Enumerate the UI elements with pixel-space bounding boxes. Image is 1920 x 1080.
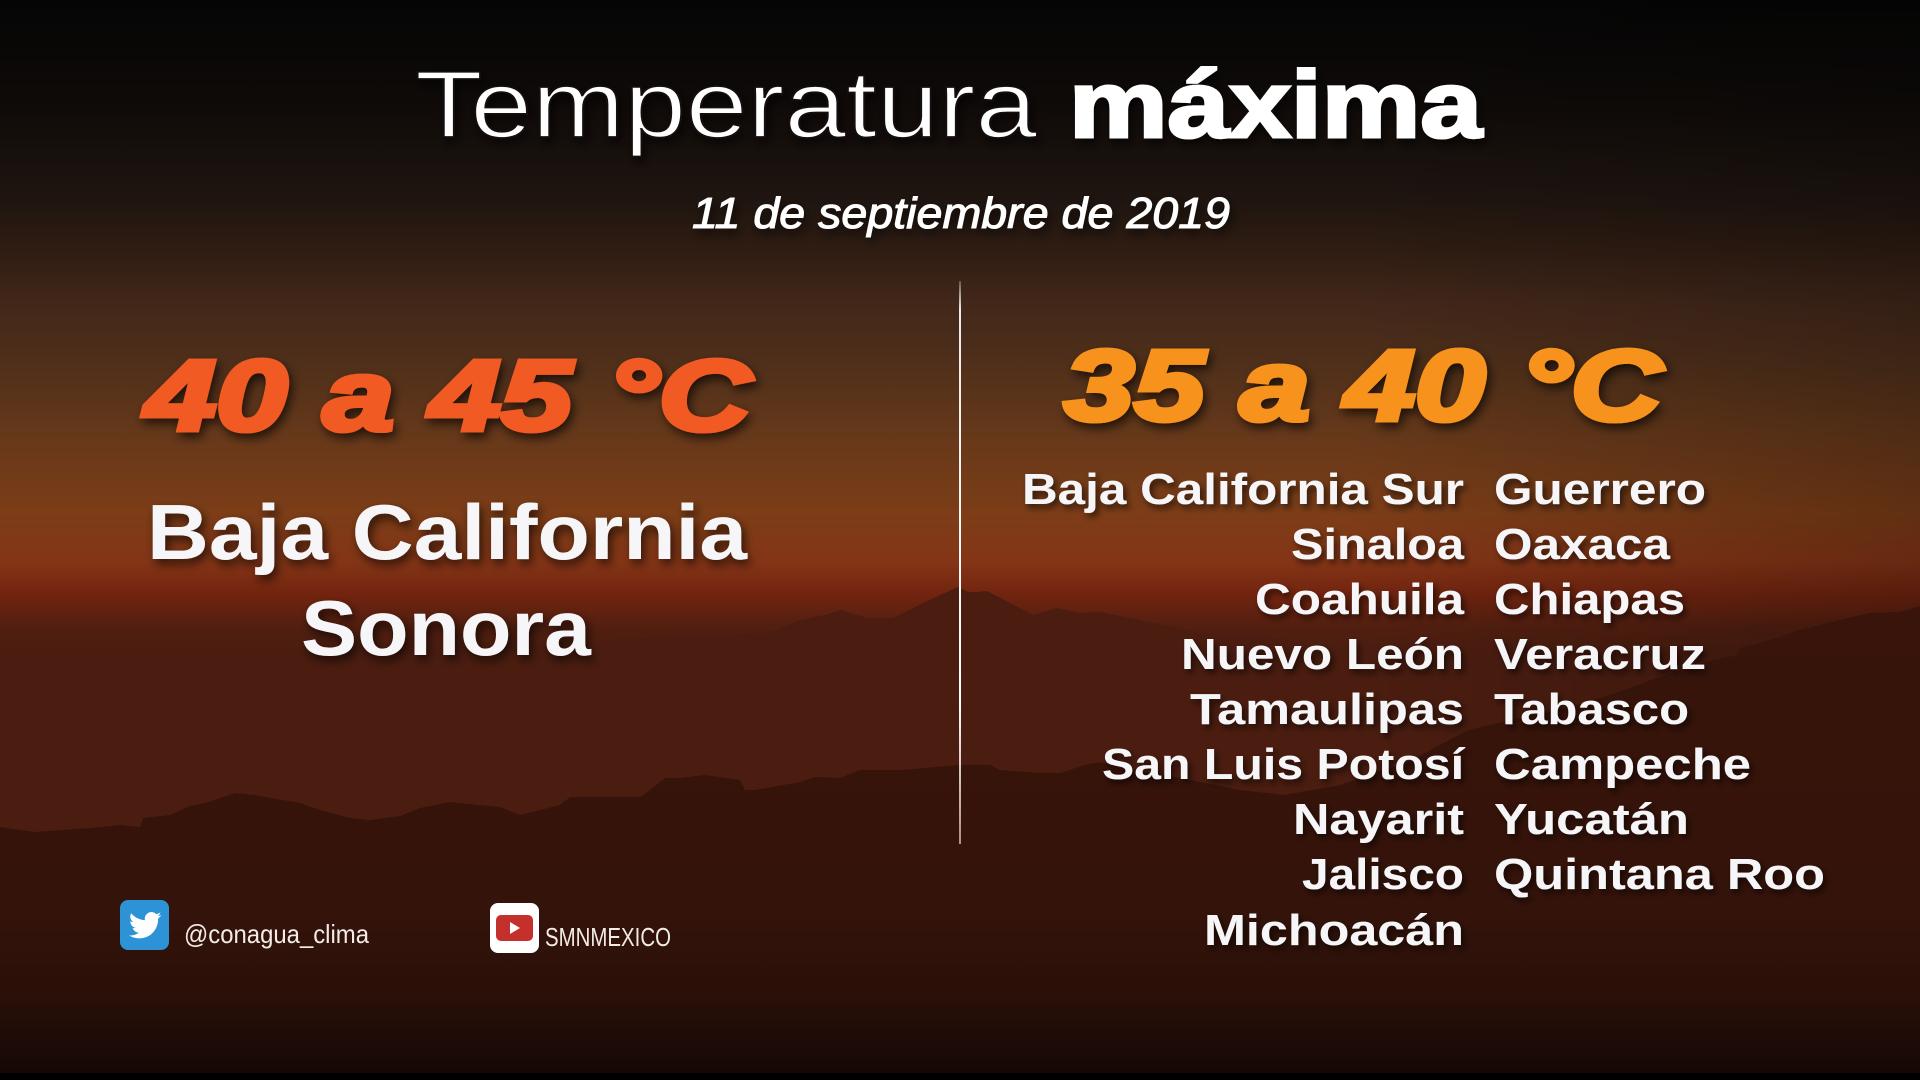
states: hottest range: Baja California (147, 488, 748, 576)
states: hottest range: Sonora (301, 584, 592, 672)
states list: right column: Quintana Roo (1494, 850, 1825, 899)
states list: left column: Jalisco (1302, 850, 1464, 899)
states list: left column: Nuevo León (1181, 630, 1464, 679)
divider (959, 281, 961, 844)
title (415, 52, 1483, 158)
states list: right column: Veracruz (1494, 630, 1706, 679)
states list: right column: Yucatán (1494, 795, 1689, 844)
states list: left column: Nayarit (1293, 795, 1464, 844)
states list: left column: San Luis Potosí (1102, 740, 1466, 789)
states list: right column: Campeche (1494, 740, 1751, 789)
title: máxima (1069, 52, 1483, 158)
heading: 40 a 45 range: 40 a 45 °C (142, 340, 753, 452)
bottom black band (0, 1073, 1920, 1080)
states: hottest range (147, 488, 748, 672)
states list: left column: Coahuila (1255, 575, 1465, 624)
states list: right column: Oaxaca (1494, 520, 1671, 569)
background: distant mountain range (600, 587, 1300, 700)
states list: right column: Tabasco (1494, 685, 1689, 734)
youtube channel: SMNMEXICO (545, 922, 671, 952)
twitter handle: @conagua_clima (184, 919, 369, 949)
states list: right column: Chiapas (1494, 575, 1685, 624)
states list: right column: Guerrero (1494, 465, 1706, 514)
states list: left column: Michoacán (1204, 906, 1464, 955)
panel: 35 a 40 °C (1022, 330, 1825, 955)
states list: right column (1494, 465, 1825, 899)
date subtitle: 11 de septiembre de 2019 (692, 189, 1230, 238)
states list: left column: Baja California Sur (1022, 465, 1464, 514)
states list: left column (1022, 465, 1466, 955)
title: Temperatura (415, 52, 1037, 158)
heading: 35 a 40 range: 35 a 40 °C (1064, 330, 1664, 442)
background: foreground hills (0, 606, 1920, 1073)
states list: left column: Tamaulipas (1190, 685, 1464, 734)
panel: 40 a 45 °C (142, 340, 753, 672)
icon: youtube (490, 903, 539, 953)
states list: left column: Sinaloa (1291, 520, 1465, 569)
icon: twitter (120, 900, 169, 950)
